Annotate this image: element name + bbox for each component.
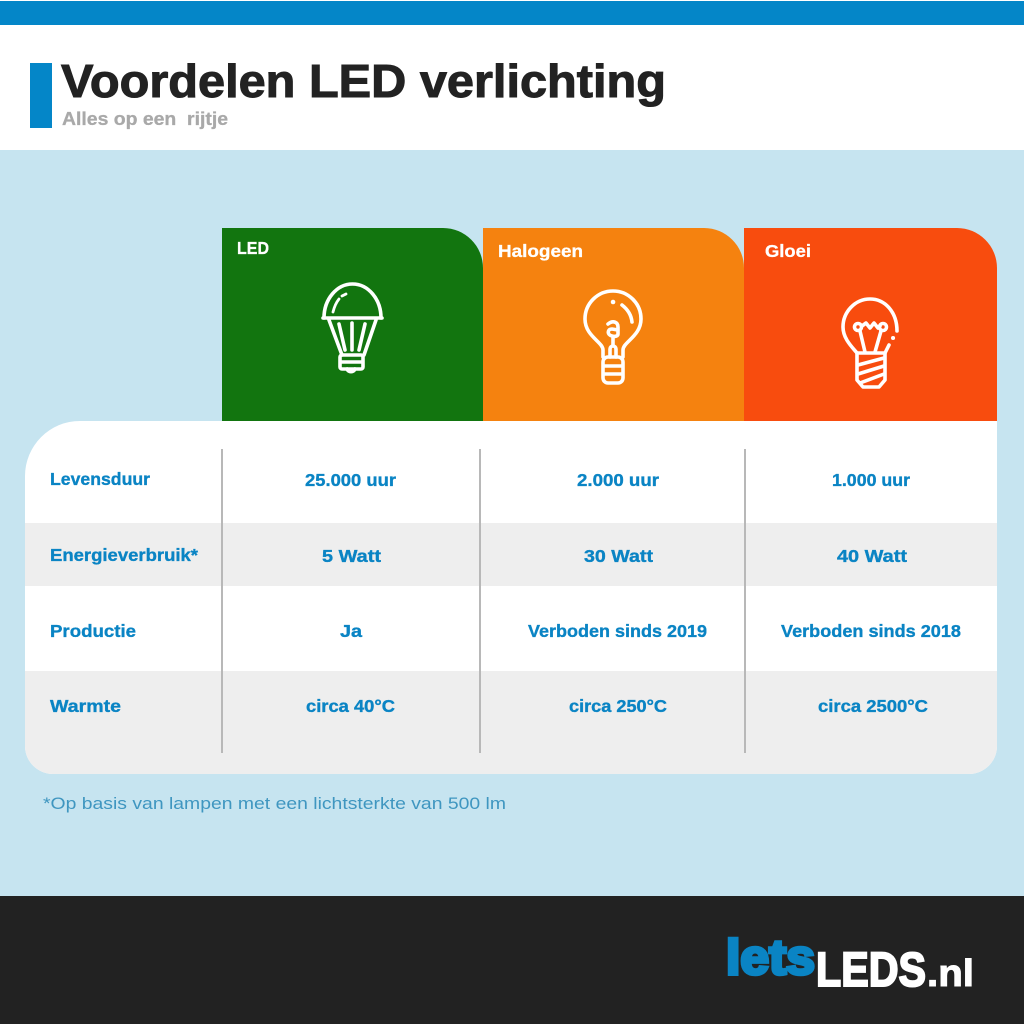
row: Levensduur: 2.000 uur (577, 470, 659, 490)
row: Levensduur (50, 469, 910, 490)
subtitle: Alles op een rijtje (62, 109, 228, 129)
icon: LED bulb (323, 284, 382, 372)
row: Energieverbruik: 30 Watt (584, 546, 653, 566)
panel: comparison table (25, 421, 997, 774)
logo: letsLEDS.nl: LEDS (816, 944, 926, 997)
row: Warmte: Warmte (50, 696, 121, 716)
icon: incandescent bulb (843, 299, 897, 387)
row: Energieverbruik: 5 Watt (322, 546, 381, 566)
row band: Energieverbruik (25, 523, 997, 586)
row: Productie: Verboden sinds 2019 (528, 621, 707, 641)
heading: Gloei: Gloei (765, 241, 811, 261)
footer band (0, 896, 1024, 1024)
row: Productie: Verboden sinds 2018 (781, 621, 961, 641)
row: Warmte: circa 40°C (306, 696, 395, 716)
heading: Halogeen: Halogeen (498, 241, 583, 261)
row: Levensduur: 1.000 uur (832, 470, 910, 490)
title: Voordelen LED verlichting (61, 55, 666, 107)
row: Levensduur: Levensduur (50, 469, 150, 489)
row: Warmte: circa 250°C (569, 696, 667, 716)
row band: Warmte (25, 671, 997, 774)
column dividers (221, 449, 746, 753)
icon: halogen bulb (585, 291, 641, 383)
heading: LED: LED (237, 238, 269, 258)
row: Energieverbruik: 40 Watt (837, 546, 907, 566)
row: Productie: Productie (50, 621, 136, 641)
panel: LED column header (222, 228, 483, 421)
footnote: *Op basis van lampen met een lichtsterkte van 500 lm (43, 794, 506, 813)
row: Energieverbruik: Energieverbruik* (50, 545, 198, 565)
panel: Halogeen column header (483, 228, 744, 421)
row: Energieverbruik (50, 545, 907, 566)
header accent block (30, 63, 52, 128)
panel: Gloei column header (744, 228, 997, 421)
row: Warmte (50, 696, 928, 716)
top bar (0, 1, 1024, 25)
row: Productie (50, 621, 961, 641)
row: Warmte: circa 2500°C (818, 696, 928, 716)
panel: light blue background (0, 150, 1024, 896)
logo: letsLEDS.nl: lets (726, 931, 815, 985)
logo: letsLEDS.nl (726, 931, 974, 997)
row: Levensduur: 25.000 uur (305, 470, 396, 490)
row: Productie: Ja (340, 621, 362, 641)
logo: letsLEDS.nl: .nl (927, 953, 974, 995)
